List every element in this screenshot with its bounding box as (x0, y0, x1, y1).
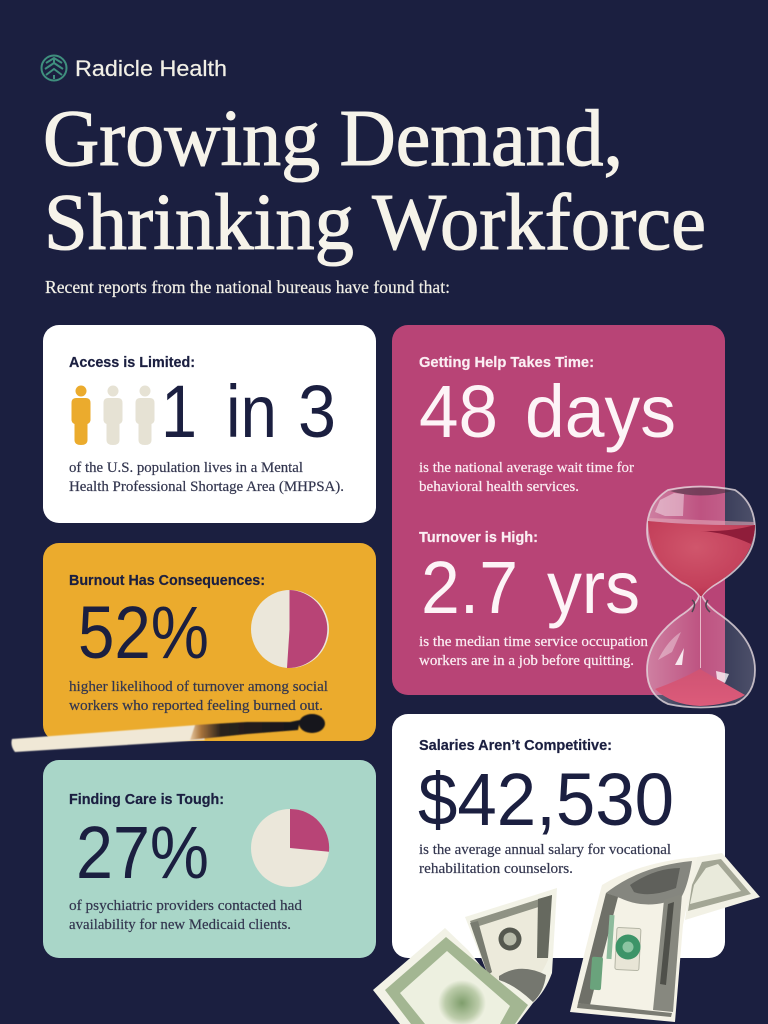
description (69, 679, 328, 714)
brand name: Radicle Health (75, 56, 227, 81)
stat: 2.7 yrs: 2.7 (421, 546, 518, 629)
description (69, 898, 302, 933)
falling sand (700, 596, 701, 668)
description: rehabilitation counselors. (419, 861, 573, 877)
description: turnover: workers are in a job before quitting. (419, 653, 634, 669)
panel: salaries (392, 714, 725, 958)
green 100 (590, 957, 603, 990)
description (419, 842, 671, 877)
serial strip (606, 915, 615, 959)
stat (161, 370, 336, 453)
description: Health Professional Shortage Area (MHPSA). (69, 479, 344, 495)
description: turnover (419, 634, 649, 669)
panel: wait time and turnover (392, 325, 725, 695)
title (43, 93, 706, 267)
stat: 48 days: 48 (419, 370, 498, 453)
bill face (470, 895, 552, 986)
description: of psychiatric providers contacted had (69, 898, 302, 914)
stat: 1 (161, 370, 197, 453)
description: wait time: behavioral health services. (419, 479, 579, 495)
panel: access is limited (43, 325, 376, 523)
heading: Access is Limited: (69, 355, 195, 371)
portrait frame strip (615, 927, 641, 971)
icon: three people (72, 386, 154, 445)
icon: burnt match (11, 714, 325, 752)
title: Shrinking Workforce (44, 177, 706, 267)
icon: dollar bill left (373, 888, 557, 1024)
description: wait time (419, 460, 634, 495)
heading: Burnout Has Consequences: (69, 573, 265, 589)
description: is the average annual salary for vocational (419, 842, 671, 858)
icon: dollar bill right (570, 853, 760, 1022)
description: workers who reported feeling burned out. (69, 698, 323, 714)
green seal (616, 934, 640, 960)
stat: 27% (76, 811, 209, 894)
top portrait (606, 861, 692, 905)
left engraved stripe (578, 893, 618, 1005)
stat: 2.7 yrs (421, 546, 640, 629)
icon: hourglass (647, 486, 755, 708)
stat: 48 days (419, 370, 676, 453)
description: availability for new Medicaid clients. (69, 917, 291, 933)
sand: top bulb (648, 521, 755, 597)
heading: Finding Care is Tough: (69, 792, 224, 808)
heading: getting help: Getting Help Takes Time: (419, 355, 594, 371)
bottom stripe (577, 1003, 672, 1017)
pie chart: 52% (251, 590, 329, 668)
heading: Salaries Aren’t Competitive: (419, 738, 612, 754)
description: higher likelihood of turnover among social (69, 679, 328, 695)
stat: $42,530 (418, 758, 674, 841)
logo: Radicle Health (42, 56, 227, 81)
stat: 48 days: days (525, 370, 676, 453)
heading: turnover: Turnover is High: (419, 530, 538, 546)
title: Growing Demand, (43, 93, 623, 183)
stat: 2.7 yrs: yrs (547, 546, 640, 629)
pie chart: 27% (251, 809, 329, 887)
description (69, 460, 344, 495)
icon: leaf roots badge (42, 56, 66, 80)
bill flap (385, 937, 528, 1024)
stat: 52% (78, 591, 209, 674)
sand: bottom pile (655, 669, 745, 706)
portrait (499, 969, 546, 1002)
back flap (685, 853, 760, 920)
panel: finding care (43, 760, 376, 958)
stat: 3 (298, 370, 336, 453)
right engraved stripe (653, 894, 682, 1012)
front face (570, 857, 697, 1022)
description: of the U.S. population lives in a Mental (69, 460, 303, 476)
stat: in (226, 370, 277, 453)
subtitle: Recent reports from the national bureaus have found that: (45, 277, 450, 297)
panel: burnout (43, 543, 376, 741)
description: wait time: is the national average wait time for (419, 460, 634, 476)
glass highlights (655, 493, 729, 683)
seal (498, 928, 522, 950)
description: turnover: is the median time service occupation (419, 634, 649, 650)
